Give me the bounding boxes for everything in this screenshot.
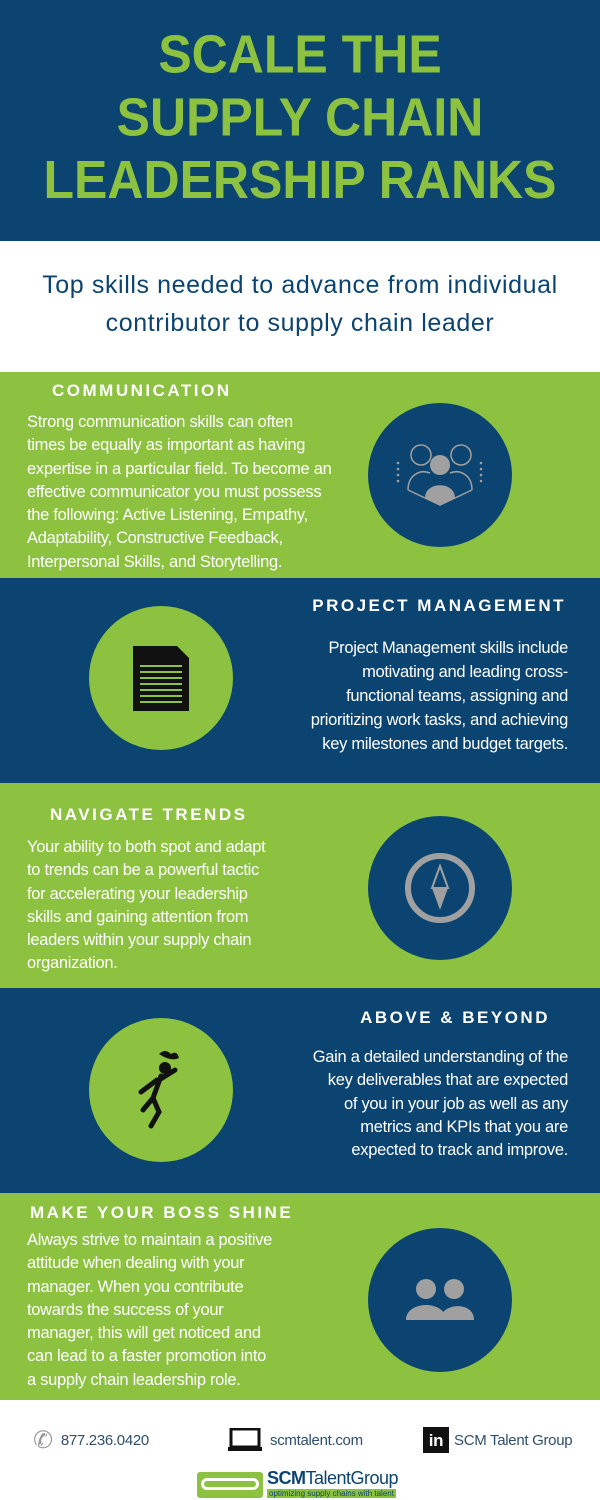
text: navigate trends [27, 838, 266, 972]
text: project management: key milestones and budget targets. [322, 735, 568, 753]
text: project management: Project Management skills include [328, 639, 568, 657]
text: communication: effective communicator you must possess [27, 483, 321, 501]
text: navigate trends: to trends can be a powerful tactic [27, 861, 259, 879]
text: boss shine: can lead to a faster promotion into [27, 1347, 266, 1365]
text: navigate trends: for accelerating your leadership [27, 885, 248, 903]
text: navigate trends: skills and gaining attention from [27, 908, 248, 926]
panel: make your boss shine [0, 1193, 600, 1400]
text: project management: motivating and leading cross- [362, 663, 568, 681]
text: project management: prioritizing work tasks, and achieving [311, 711, 568, 729]
text: navigate trends: Your ability to both spot and adapt [27, 838, 265, 856]
text: communication: Interpersonal Skills, and Storytelling. [27, 553, 282, 571]
text: boss shine: manager, this will get noticed and [27, 1324, 261, 1342]
text: communication: expertise in a particular field. To become an [27, 460, 331, 478]
title: SUPPLY CHAIN [117, 87, 483, 147]
title: SCALE THE [158, 24, 442, 85]
text: communication: the following: Active Listening, Empathy, [27, 506, 308, 524]
text: above and beyond: of you in your job as well as any [344, 1095, 568, 1113]
contact: phone: 877.236.0420 [61, 1432, 149, 1448]
text: navigate trends: organization. [27, 954, 118, 972]
heading: project management: PROJECT MANAGEMENT [312, 596, 566, 615]
heading: above and beyond: ABOVE & BEYOND [360, 1008, 550, 1027]
icon: compass [368, 816, 512, 960]
contact: linkedin [423, 1427, 572, 1453]
text: above and beyond: expected to track and improve. [351, 1141, 568, 1159]
contact: website [228, 1428, 363, 1451]
header banner [0, 0, 600, 241]
text: above and beyond: metrics and KPIs that you are [360, 1118, 568, 1136]
subtitle [42, 271, 558, 337]
footer [33, 1426, 572, 1498]
panel: communication [0, 372, 600, 578]
text: above and beyond [313, 1048, 568, 1159]
text: project management: functional teams, assigning and [346, 687, 568, 705]
text: communication: times be equally as important as having [27, 436, 305, 454]
title [43, 24, 557, 210]
text: boss shine: attitude when dealing with your [27, 1254, 244, 1272]
subtitle: contributor to supply chain leader [106, 309, 494, 337]
text: boss shine: manager. When you contribute [27, 1278, 243, 1296]
icon: team [368, 403, 512, 547]
title: LEADERSHIP RANKS [43, 149, 557, 210]
text: communication: Adaptability, Constructive Feedback, [27, 529, 283, 547]
text: above and beyond: key deliverables that are expected [328, 1071, 568, 1089]
contact: phone: ✆ [33, 1426, 53, 1454]
logo: SCMTalentGroup [267, 1468, 398, 1488]
icon: document [89, 606, 233, 750]
text: boss shine: Always strive to maintain a positive [27, 1231, 272, 1249]
heading: communication: COMMUNICATION [52, 381, 232, 400]
subtitle: Top skills needed to advance from individual [42, 271, 558, 299]
contact: website: scmtalent.com [270, 1432, 363, 1448]
icon: climber [89, 1018, 233, 1162]
text: communication: Strong communication skills can often [27, 413, 293, 431]
contact: linkedin: SCM Talent Group [454, 1432, 572, 1448]
text: boss shine: towards the success of your [27, 1301, 223, 1319]
logo [197, 1468, 398, 1498]
panel: project management [0, 578, 600, 783]
text: communication [27, 413, 331, 571]
text: navigate trends: leaders within your supply chain [27, 931, 251, 949]
contact: linkedin: in [429, 1431, 443, 1450]
heading: navigate trends: NAVIGATE TRENDS [50, 805, 247, 824]
heading: boss shine: MAKE YOUR BOSS SHINE [30, 1203, 293, 1222]
text: above and beyond: Gain a detailed understanding of the [313, 1048, 568, 1066]
contact: phone [33, 1426, 149, 1454]
panel: navigate trends [0, 783, 600, 988]
icon: people [368, 1228, 512, 1372]
logo: optimizing supply chains with talent [269, 1489, 394, 1498]
text: boss shine [27, 1231, 272, 1389]
panel: above and beyond [0, 988, 600, 1193]
text: boss shine: a supply chain leadership role. [27, 1371, 241, 1389]
text: project management [311, 639, 568, 753]
